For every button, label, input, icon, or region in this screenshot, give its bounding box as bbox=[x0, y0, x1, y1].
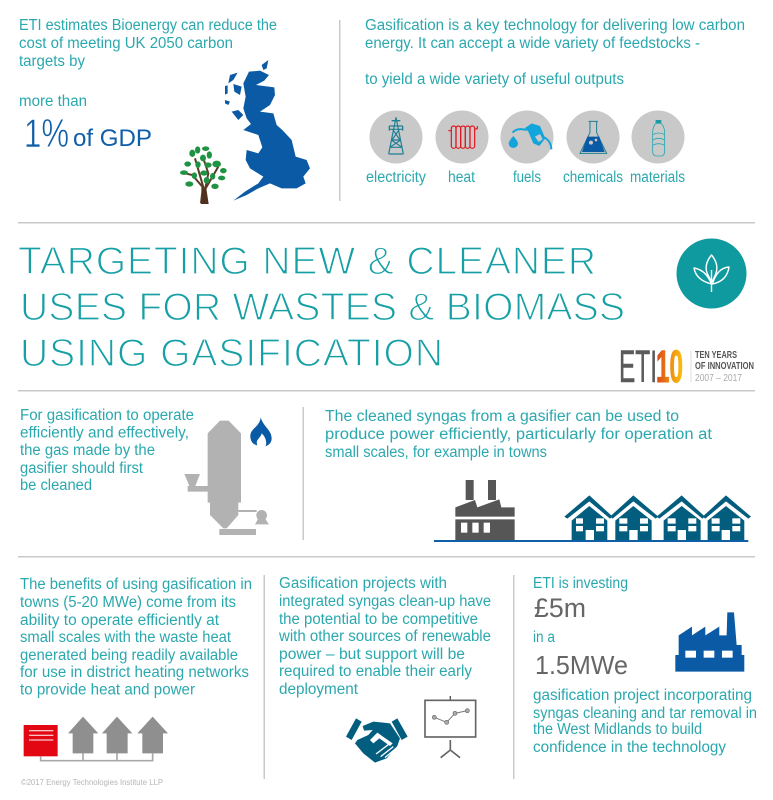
text: syngas clean-up projects: Gasification projects with bbox=[279, 575, 447, 592]
text: benefits in towns: to provide heat and power bbox=[20, 682, 195, 698]
icon: row of houses bbox=[434, 495, 751, 542]
text: bioenergy estimate bbox=[19, 17, 277, 110]
text: syngas clean-up projects: required to enable their early bbox=[279, 663, 472, 680]
text: benefits in towns bbox=[20, 576, 252, 698]
text: gasification intro: Gasification is a key technology for delivering low carbon bbox=[365, 17, 745, 34]
text: clean the gas bbox=[20, 407, 194, 494]
text: clean the gas: be cleaned bbox=[20, 477, 92, 494]
icon: chart on easel bbox=[425, 696, 476, 758]
icon: heat bbox=[436, 110, 488, 164]
text: bioenergy estimate: cost of meeting UK 2050 carbon bbox=[19, 35, 233, 52]
logo: ETI 10: OF INNOVATION bbox=[695, 361, 754, 372]
statistic: investment: £5m bbox=[534, 593, 586, 623]
text: bioenergy estimate: more than bbox=[19, 93, 87, 110]
text: gasification intro: to yield a wide variety of useful outputs bbox=[365, 71, 624, 88]
statistic: 1% of GDP bbox=[24, 112, 152, 156]
text: project description: the West Midlands to build bbox=[533, 721, 702, 738]
statistic: investment: 1.5MWe bbox=[535, 650, 628, 680]
output labels bbox=[366, 169, 685, 186]
text: bioenergy estimate: targets by bbox=[19, 53, 85, 70]
text: cleaned syngas: produce power efficiently, particularly for operation at bbox=[325, 426, 713, 443]
text: ETI is investing: in a bbox=[533, 629, 555, 646]
output labels: chemicals bbox=[563, 169, 623, 186]
text: syngas clean-up projects: power – but support will be bbox=[279, 646, 465, 663]
copyright: ©2017 Energy Technologies Institute LLP bbox=[21, 777, 163, 787]
text: gasification intro: energy. It can accept a wide variety of feedstocks - bbox=[365, 35, 700, 52]
icon: leaf badge bbox=[676, 238, 746, 308]
statistic: investment bbox=[534, 593, 628, 680]
icon: district heating network bbox=[24, 717, 168, 761]
text: benefits in towns: small scales with the waste heat bbox=[20, 629, 232, 646]
text: project description: syngas cleaning and tar removal in bbox=[533, 705, 757, 722]
text: syngas clean-up projects: with other sources of renewable bbox=[278, 628, 491, 645]
icon: UK map bbox=[225, 60, 310, 201]
text: clean the gas: gasifier should first bbox=[20, 460, 144, 477]
output labels: electricity bbox=[366, 169, 426, 186]
title: USES FOR WASTES & BIOMASS bbox=[20, 286, 625, 329]
text: clean the gas: efficiently and effectively, bbox=[20, 424, 189, 442]
title: USING GASIFICATION bbox=[20, 332, 443, 375]
logo: ETI 10: ETI bbox=[619, 341, 657, 392]
text: syngas clean-up projects bbox=[278, 575, 491, 698]
text: benefits in towns: towns (5-20 MWe) come from its bbox=[20, 594, 236, 611]
logo: ETI 10: 2007 – 2017 bbox=[695, 373, 742, 384]
text: cleaned syngas: small scales, for example in towns bbox=[325, 444, 547, 461]
icon: flame bbox=[250, 417, 272, 446]
logo: ETI 10: TEN YEARS bbox=[695, 350, 737, 361]
text: project description: confidence in the technology bbox=[533, 739, 726, 756]
outputs icon row bbox=[370, 110, 684, 164]
icon: chemicals bbox=[566, 110, 620, 164]
text: gasification intro bbox=[365, 17, 745, 88]
text: bioenergy estimate: ETI estimates Bioenergy can reduce the bbox=[19, 17, 277, 34]
text: benefits in towns: ability to operate efficiently at bbox=[20, 612, 220, 629]
text: clean the gas: the gas made by the bbox=[20, 442, 155, 459]
icon: power plant bbox=[455, 480, 515, 540]
icon: tree bbox=[180, 146, 227, 204]
text: syngas clean-up projects: integrated syngas clean-up have bbox=[279, 593, 491, 610]
title bbox=[18, 240, 625, 375]
logo: ETI 10 bbox=[619, 341, 754, 392]
icon: handshake bbox=[346, 718, 408, 763]
icon: materials bbox=[632, 110, 684, 164]
text: ETI is investing: ETI is investing bbox=[533, 575, 628, 592]
text: syngas clean-up projects: the potential to be competitive bbox=[279, 611, 478, 628]
icon: electricity bbox=[370, 110, 422, 164]
text: benefits in towns: generated being readily available bbox=[20, 647, 238, 664]
output labels: fuels bbox=[513, 169, 541, 186]
text: project description: gasification project incorporating bbox=[533, 687, 752, 704]
text: clean the gas: For gasification to operate bbox=[20, 407, 194, 424]
text: benefits in towns: The benefits of using gasification in bbox=[20, 576, 252, 593]
icon: fuels bbox=[500, 110, 554, 164]
text: cleaned syngas bbox=[325, 408, 713, 461]
statistic: 1% of GDP: 1% bbox=[24, 112, 69, 156]
logo: ETI 10: 10 bbox=[656, 341, 683, 392]
text: syngas clean-up projects: deployment bbox=[279, 681, 359, 698]
title: TARGETING NEW & CLEANER bbox=[18, 240, 596, 283]
text: project description bbox=[533, 687, 757, 756]
icon: factory bbox=[675, 612, 744, 672]
output labels: materials bbox=[630, 169, 685, 186]
text: cleaned syngas: The cleaned syngas from a gasifier can be used to bbox=[325, 408, 679, 425]
text: ETI is investing bbox=[533, 575, 628, 646]
output labels: heat bbox=[448, 169, 476, 186]
text: benefits in towns: for use in district heating networks bbox=[20, 664, 249, 681]
icon: gasifier bbox=[184, 421, 269, 535]
statistic: 1% of GDP: of GDP bbox=[73, 125, 152, 152]
